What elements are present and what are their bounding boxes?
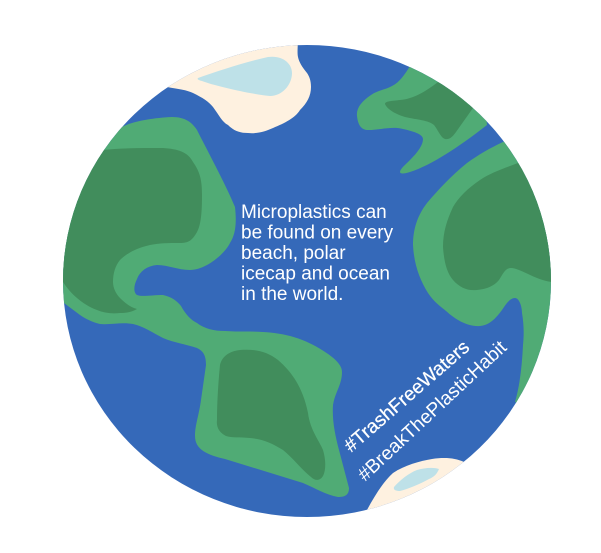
- icecap lake: [394, 468, 439, 491]
- hashtag: TrashFreeWaters: #TrashFreeWaters: [341, 337, 474, 457]
- main message: icecap and ocean: [241, 264, 390, 284]
- south polar ice cap: [367, 458, 464, 510]
- main message: in the world.: [241, 284, 343, 305]
- north-east continent: [356, 67, 487, 174]
- north polar ice cap: [168, 45, 311, 134]
- east continent: [413, 142, 551, 402]
- north-west continent: [40, 117, 349, 497]
- north-west continent inland: [63, 148, 202, 314]
- main message: beach, polar: [241, 243, 346, 264]
- main message: be found on every: [241, 222, 394, 244]
- icecap lake: [198, 57, 292, 96]
- south continent inland: [217, 350, 325, 480]
- globe: [63, 45, 551, 517]
- north-east continent inland: [385, 82, 473, 139]
- east continent inland: [443, 163, 551, 290]
- main message: Microplastics can: [241, 202, 387, 223]
- ocean: [63, 45, 551, 517]
- hashtag: BreakThePlasticHabit: #BreakThePlasticHabit: [354, 337, 512, 486]
- landmasses and ice caps: [63, 45, 551, 510]
